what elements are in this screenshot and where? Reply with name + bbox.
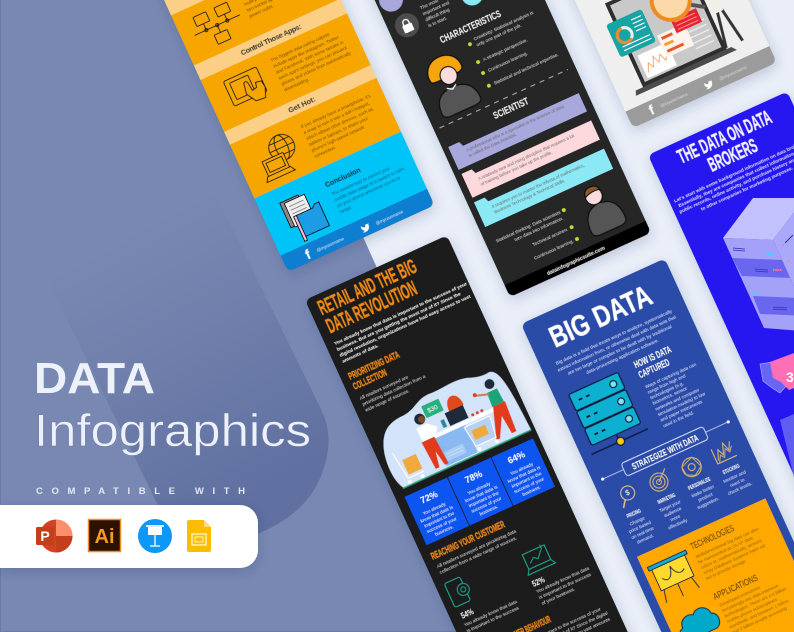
column: stocking: Monitor and [722, 469, 747, 484]
conclusion text: The easiest way to control your [331, 166, 391, 197]
heading: prioritizing data collection: COLLECTION [351, 368, 389, 393]
capture text: used in the field. [662, 410, 695, 428]
headline: data: DATA [34, 354, 155, 403]
strategize with data banner [599, 415, 733, 487]
laptop illustration [596, 0, 745, 96]
column: marketing: effectively. [667, 517, 689, 531]
pink note: of training before you take up the profile. [480, 150, 553, 187]
intro text [554, 308, 684, 386]
intro text: important and [422, 0, 450, 16]
title [314, 255, 429, 338]
capture text [644, 361, 715, 428]
tip text: get hot: connection. [313, 145, 337, 159]
column: personalize: suggestion. [696, 496, 720, 510]
headline: infographics: Infographics [34, 405, 311, 456]
compatible with label: COMPATIBLE WITH [36, 486, 245, 497]
stat box: 64%: You already [509, 461, 534, 476]
column: marketing: Target your [658, 499, 682, 513]
reaching text: collection from a wide range of sources. [439, 535, 518, 576]
prioritizing text [359, 368, 430, 414]
column: personalize [677, 453, 721, 510]
technologies text [695, 526, 770, 581]
icon: google slides [187, 520, 211, 552]
retail store illustration: $30 [426, 404, 440, 415]
dashed divider [440, 70, 568, 128]
applications text: increasingly use data-intensive [721, 583, 780, 613]
icon: network monitors [192, 2, 240, 45]
price tag [421, 399, 444, 418]
icon: folder with documents [279, 194, 330, 242]
capture text: and paper instruments [660, 399, 704, 423]
column: personalize: PERSONALIZE [687, 476, 712, 492]
heading: get hot: Get Hot: [287, 95, 317, 115]
social handles: @myusername [316, 236, 345, 253]
intro text: business. But are you getting the most out of it? Since the [336, 291, 462, 353]
stat: 52%: is important to the success [538, 572, 593, 601]
footer website: datainfographicsuite.com [546, 245, 606, 277]
white software bar [0, 505, 258, 568]
column: pricing: price based [628, 520, 652, 534]
applications text: Developed economies [719, 584, 762, 608]
column: marketing: audience [663, 506, 683, 518]
tip text: control those apps: The biggest data-eating culprits [270, 31, 331, 63]
icon: woman with blonde hair [427, 54, 482, 118]
purple note [448, 89, 587, 170]
stat box: 78%: You already [467, 481, 492, 496]
column: pricing: on real-time [630, 525, 655, 540]
prioritizing text: prioritizing data collection from a [362, 374, 427, 408]
column: marketing [644, 468, 690, 531]
icon: cloud [673, 602, 722, 632]
column: pricing: Change [629, 515, 646, 527]
icon: illustrator: Ai [94, 526, 114, 548]
card: orange mobile data tips [161, 0, 438, 274]
icon: keynote [138, 519, 172, 553]
intro text: is to start. [427, 15, 448, 28]
heading: how is data captured [632, 345, 678, 381]
teal data card [606, 9, 656, 58]
tip text: get hot: phone's high-speed network [311, 124, 366, 153]
alarm and monitor [444, 393, 464, 411]
tip text: control those apps: each app's settings, you can prevent [278, 45, 348, 81]
column: marketing: MARKETING [657, 493, 677, 506]
heading: conclusion: Conclusion [324, 167, 362, 189]
intro text: are too large or complex to be dealt with by traditional [567, 324, 673, 377]
card: grey laptop infographic [568, 0, 780, 134]
stat box: 78%: success of your [470, 496, 502, 514]
capture text: simulation models) to low [657, 391, 707, 417]
stat box: 64%: success of your [513, 476, 545, 494]
tip text: control those apps: photos and videos from automatically [281, 50, 352, 87]
top tip text: power outlet. [249, 3, 275, 19]
heading: how is data captured: CAPTURED [637, 357, 672, 381]
title [675, 110, 774, 172]
capture text: biometrics, sensor [652, 386, 688, 406]
applications text: technologies. There are 4.6 billion [724, 586, 787, 619]
scientist list [496, 208, 580, 260]
stat box: 72% [405, 478, 469, 545]
social handles: @myusername [719, 64, 748, 81]
technologies text: out to provide storage [705, 558, 747, 581]
icon: presentation board [647, 550, 703, 605]
conclusion text: on your phone whenever you're in [336, 175, 401, 208]
column: pricing [611, 483, 658, 546]
stat: 54% [459, 589, 521, 632]
intro text: amounts of data. [341, 343, 380, 365]
reaching text: All retailers surveyed are prioritizing data [436, 528, 518, 570]
capture text: technologies (e.g. [649, 381, 684, 400]
technologies text: Array Database Systems have set [702, 543, 767, 576]
tip text: control those apps: include apps like Instagram, Twitter [272, 34, 340, 69]
stat box: 78%: 78% [463, 469, 484, 485]
scientist list: turn data into information. [514, 216, 564, 242]
intro text: difficult thing [425, 7, 451, 22]
stat box: 64%: business. [521, 484, 542, 497]
characteristics list: A strategic perspective. [482, 37, 528, 62]
stat box: 72%: important to the [423, 510, 455, 529]
heading: scientist: SCIENTIST [492, 96, 531, 122]
intro text: data-processing application software. [585, 338, 660, 376]
pink note: A relatively new and rising discipline that requires a lot [477, 133, 576, 181]
left customer [412, 412, 427, 426]
capture text: networks and computer [654, 387, 700, 411]
scientist list: Continuous learning. [533, 238, 574, 261]
column: personalize: product [697, 491, 714, 503]
column: stocking: STOCKING [722, 463, 741, 476]
tip text: get hot: If you already have a smartphone, it's [300, 93, 372, 129]
intro text: You already know that data is important to the success of your [333, 281, 468, 347]
icon: tablet touch [223, 66, 268, 106]
slate background panel [0, 0, 540, 632]
heading: how is data captured: HOW IS DATA [632, 345, 673, 371]
shopping carts [393, 445, 424, 480]
stat: 54%: You already know that data [463, 599, 518, 628]
US map with pink state [760, 353, 794, 393]
scientist list: Technical acumen. [532, 227, 569, 247]
grey footer band [626, 46, 777, 128]
social handles: f [302, 246, 313, 262]
technologies text: be represented as OLAP data [697, 535, 754, 565]
intro text: Big data is a field that treats ways to analyze, systematically [555, 308, 674, 367]
icon: server stack [565, 371, 650, 458]
tip text: control those apps: downloading. [283, 77, 310, 92]
tip text: control those apps [270, 33, 350, 92]
capture text: Ways of capturing data can [644, 361, 697, 389]
icon: phone gear [444, 575, 474, 607]
top tip text [244, 0, 274, 19]
conclusion text: range. [339, 204, 353, 214]
column: stocking [708, 439, 753, 496]
column: pricing: PRICING [626, 508, 642, 520]
orange panel [637, 498, 794, 632]
characteristics list: Statistical and technical expertise. [493, 52, 559, 86]
purple note: is called the Data Scientist. [468, 132, 518, 158]
tip text: get hot [300, 94, 374, 158]
pink note [462, 116, 600, 198]
intro text: extract information from, or otherwise deal with data sets that [557, 314, 678, 374]
cyan note: Business Technology & Technical Skills. [493, 178, 566, 215]
lower map panel [780, 414, 794, 477]
intro text: digital revolution, organizations have had easy access to vast [339, 294, 472, 359]
stat box: 78%: important to the [468, 490, 500, 508]
technologies text: Multidimensional big data can also [695, 526, 760, 559]
column: stocking: check levels. [727, 481, 753, 496]
isometric server illustration [723, 198, 794, 332]
social handles [304, 210, 404, 260]
social handles: @myusername [375, 209, 405, 226]
card: big data [521, 258, 794, 632]
card: retail and the big data revolution [305, 235, 638, 632]
strategize with data banner: STRATEGIZE WITH DATA [630, 433, 700, 473]
intro text: to other companies for marketing purposes. [700, 165, 794, 212]
stat box: 72%: know that data is [420, 504, 454, 524]
column: personalize: Make better [691, 484, 715, 499]
stat box: 78% [448, 458, 513, 525]
tip text: get hot: which allows other devices, such as [305, 106, 374, 141]
characteristics list [466, 8, 559, 89]
column: stocking: react to [729, 477, 746, 488]
capture text: range from high end [647, 373, 687, 395]
black footer band [505, 221, 651, 297]
stat box: 72%: You already [422, 501, 447, 516]
prioritizing text: All retailers surveyed are [359, 374, 410, 402]
characteristics list: Creativity: Statistical analysis is [473, 10, 535, 42]
icon: man with brown hair [584, 186, 626, 236]
heading: control those apps: Control Those Apps: [239, 22, 303, 57]
right clerk [483, 377, 496, 391]
column: pricing: $ [625, 489, 631, 497]
cyan note [474, 144, 613, 227]
column: marketing: more [670, 513, 682, 522]
applications text: worldwide, and between 1 billion [729, 598, 790, 630]
icon: illustrator [88, 520, 120, 552]
social handles: @myusername [659, 91, 689, 108]
card: data brokers [648, 93, 794, 488]
stat: 52%: of your business. [541, 586, 576, 607]
tip text: get hot: a snap to turn it into a WiFi hotspot, [303, 101, 371, 135]
social handles: f [646, 101, 657, 118]
stat box: 64% [492, 438, 555, 506]
icon: powerpoint: P [40, 528, 50, 544]
stat box: 64%: know that data is [507, 465, 542, 484]
stat box: 72%: success of your [426, 516, 458, 534]
stat box: 78%: know that data is [464, 484, 499, 503]
bottom edge line [0, 631, 460, 632]
heading: prioritizing data collection: PRIORITIZING DATA [347, 350, 402, 383]
stat: 52% [531, 556, 596, 607]
stat box: 78%: business. [479, 504, 499, 517]
icon: powerpoint [36, 520, 72, 552]
characteristics list: Continuous learning. [487, 51, 528, 73]
applications text [719, 575, 794, 632]
stat: 54%: 54% [460, 607, 475, 621]
heading: reaching your customer: REACHING YOUR CUSTOMER [429, 519, 507, 563]
stat: 52%: 52% [531, 575, 546, 589]
intro text [420, 0, 450, 28]
applications text: mobile-phone subscriptions [726, 597, 779, 624]
tip text: get hot: tablets or laptops, to share your [308, 116, 369, 147]
social handles [648, 66, 747, 115]
stat box: 72%: 72% [419, 489, 439, 506]
title: DATA REVOLUTION [323, 277, 421, 338]
stat box: 64%: 64% [506, 449, 527, 466]
icon: lock badge [391, 9, 423, 41]
cyan note: It requires you to master the trifecta of mathematics, [491, 163, 585, 209]
stat box: 64%: important to the [511, 471, 543, 489]
tip text: control those apps: and Facebook. With some tweaks in [275, 39, 345, 75]
heading: applications: APPLICATIONS [712, 573, 759, 602]
stat box: 72%: business. [434, 524, 454, 537]
column: pricing: demand. [636, 533, 654, 545]
card: dark characteristics and scientist [344, 0, 651, 297]
scientist list: Statistical thinking: Data scientists [495, 209, 562, 244]
title: BIG DATA [544, 279, 657, 354]
purple note: A professional who is a specialist in the science of data [465, 104, 565, 153]
darker rounded background band [0, 0, 329, 560]
counter [434, 424, 478, 466]
stat: 52%: You already know that data [535, 565, 591, 595]
icon: laptop chart [519, 542, 556, 575]
icon: globe and laptop [262, 134, 296, 184]
heading: technologies: TECHNOLOGIES [689, 523, 736, 552]
prioritizing text: wide range of sources. [364, 388, 411, 414]
left edge line [0, 0, 1, 632]
conclusion text: mobile data usage is to switch to WiFi [333, 166, 405, 203]
retail store illustration [368, 361, 531, 490]
title: RETAIL AND THE BIG [314, 255, 420, 320]
technologies text: cubes or, mathematically, tensors. [700, 538, 763, 570]
characteristics list: only one part of the job. [476, 23, 522, 47]
